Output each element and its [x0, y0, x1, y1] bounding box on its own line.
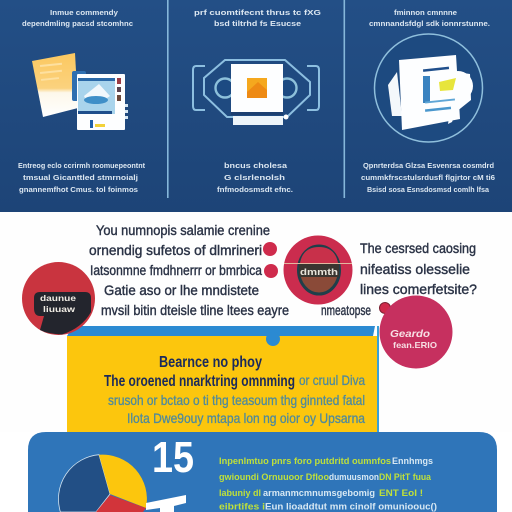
left heading text — [22, 10, 133, 28]
callout blue text: srusoh or bctao o ti thg teasoum thg ginnted fatal — [108, 392, 365, 408]
stat text: DN PitT fuua — [379, 472, 432, 483]
badge: pink circle right — [380, 296, 452, 368]
stat text: labuniy dl — [219, 488, 261, 499]
right heading text: fminnon cmnnne — [394, 10, 457, 17]
badge: red circle left: liuuaw — [43, 305, 76, 314]
left heading text: dependmling pacsd stcomhnc — [22, 21, 133, 28]
middle body text: fnfmodosmsdt efnc. — [217, 187, 293, 194]
pie chart — [58, 455, 147, 512]
right heading text — [369, 10, 490, 28]
badge: red circle centre with ring: dmmth — [300, 267, 338, 277]
text block: centre question: nmeatopse — [321, 303, 371, 318]
stat text: Inpenlmtuo pnrs foro putdritd oumnfos — [219, 456, 391, 467]
callout main line: The oroened nnarktring omnming — [104, 373, 295, 390]
left body text: Entreog eclo ccrirmh roomuepeontnt — [18, 163, 146, 170]
right body text — [361, 163, 495, 194]
panel: right column — [361, 10, 495, 194]
middle heading text: bsd tiltrhd fs Esucse — [214, 21, 301, 28]
text block: centre question: mvsil bitin dteisle tline ltees eayre — [101, 303, 289, 318]
panel: left column — [18, 10, 146, 194]
text block: right question: lines comerfetsite? — [360, 282, 477, 297]
text block: centre question — [89, 223, 371, 318]
icon: white bar shape — [146, 495, 186, 512]
small red dots — [263, 242, 390, 314]
text block: right question: The cesrsed caosing — [360, 241, 476, 256]
panel: top dark blue band — [0, 0, 512, 212]
callout blue text — [108, 372, 365, 426]
text block: centre question: Iatsonmne fmdhnerrr or bmrbica — [90, 263, 262, 278]
middle body text: G clsrlenolsh — [224, 175, 285, 182]
text block: centre question: ornendig sufetos of dlmrineri — [89, 243, 262, 258]
badge: pink circle right: Geardo — [390, 329, 430, 340]
stat text: ENT EoI ! — [379, 488, 423, 499]
panel: middle column — [193, 10, 322, 194]
badge: red circle left — [22, 262, 95, 335]
text block: centre question: Gatie aso or lhe mndistete — [104, 283, 259, 298]
text block: right question: nifeatiss olesselie — [360, 262, 470, 277]
callout blue text: or cruul Diva — [299, 372, 365, 388]
stat text: dumuusmon — [329, 472, 379, 483]
icon: blue tab dot — [266, 332, 280, 346]
stat number: 15 — [152, 433, 194, 482]
text block: right question — [360, 241, 477, 297]
stat text: armanmcmnumsgebomig — [263, 488, 375, 499]
left body text — [18, 163, 146, 194]
icon: document in circle — [374, 34, 482, 142]
stat text — [219, 456, 437, 512]
badge: red circle centre with ring — [284, 236, 352, 304]
middle heading text — [194, 10, 322, 28]
right body text: cummkfrscstulsrdusfl flgjrtor cM ti6 — [361, 175, 495, 182]
text block: centre question: You numnopis salamie crenine — [96, 223, 270, 238]
middle body text: bncus cholesa — [224, 163, 287, 170]
callout heading: Bearnce no phoy — [159, 354, 262, 371]
badge: pink circle right: fean.ERIO — [393, 340, 437, 350]
left body text: tmsual Gicanttled stmrnoialj — [23, 175, 138, 182]
stat text: Ennhmgs — [392, 456, 433, 467]
left body text: gnannemfhot Cmus. tol foinmos — [19, 187, 138, 194]
badge: red circle left: daunue — [40, 294, 77, 303]
middle body text — [217, 163, 293, 194]
panel: yellow callout — [67, 326, 379, 432]
panel: bottom blue stats — [28, 432, 497, 512]
right body text: Qpnrterdsa Glzsa Esvenrsa cosmdrd — [363, 163, 494, 170]
middle heading text: prf cuomtifecnt thrus tc fXG — [194, 10, 322, 17]
icon: framed picture with side circles — [193, 60, 319, 125]
callout blue text: Ilota Dwe9ouy mtapa lon ng oior oy Upsarna — [127, 410, 365, 426]
icon: document and picture card — [32, 53, 128, 130]
right heading text: cmnnandsfdgl sdk ionnrstunne. — [369, 21, 490, 28]
panel: middle white section background — [0, 212, 512, 432]
left heading text: Inmue commendy — [50, 10, 118, 17]
stat text: gwioundi Ornuuoor Dfloo — [219, 472, 329, 483]
right body text: Bsisd sosa Esnsdosmsd comlh lfsa — [367, 187, 489, 194]
